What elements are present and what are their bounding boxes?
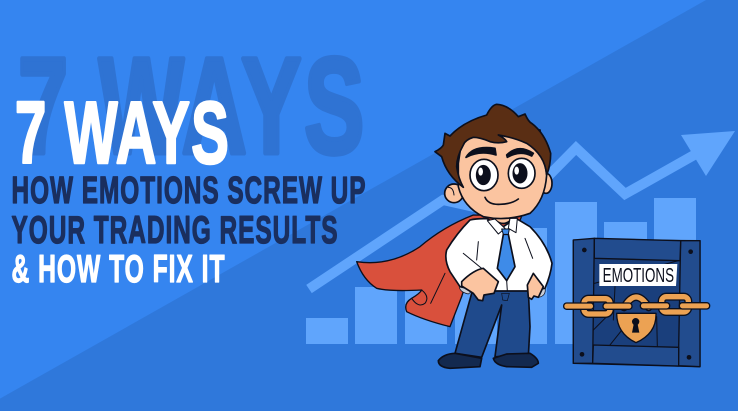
subtitle line 3: & HOW TO FIX IT <box>12 248 226 291</box>
head: face, hair, eyes and smile <box>435 104 552 219</box>
cape <box>357 215 522 327</box>
locked emotions crate <box>564 238 710 367</box>
ghost heading: 7 WAYS <box>18 30 367 183</box>
body: legs, shirt, tie and hands <box>438 213 552 368</box>
emotions label: EMOTIONS <box>603 265 674 287</box>
chart: rising bars <box>306 198 696 344</box>
character: superhero trader <box>357 104 552 368</box>
padlock <box>617 297 656 343</box>
chart: trend arrow <box>309 131 735 289</box>
subtitle line 2: YOUR TRADING RESULTS <box>12 209 338 252</box>
subtitle line 1: HOW EMOTIONS SCREW UP <box>12 170 366 212</box>
chain <box>564 297 710 314</box>
emotions label <box>599 264 677 287</box>
crate body <box>573 238 700 367</box>
title: 7 ways: 7 WAYS <box>15 83 230 182</box>
